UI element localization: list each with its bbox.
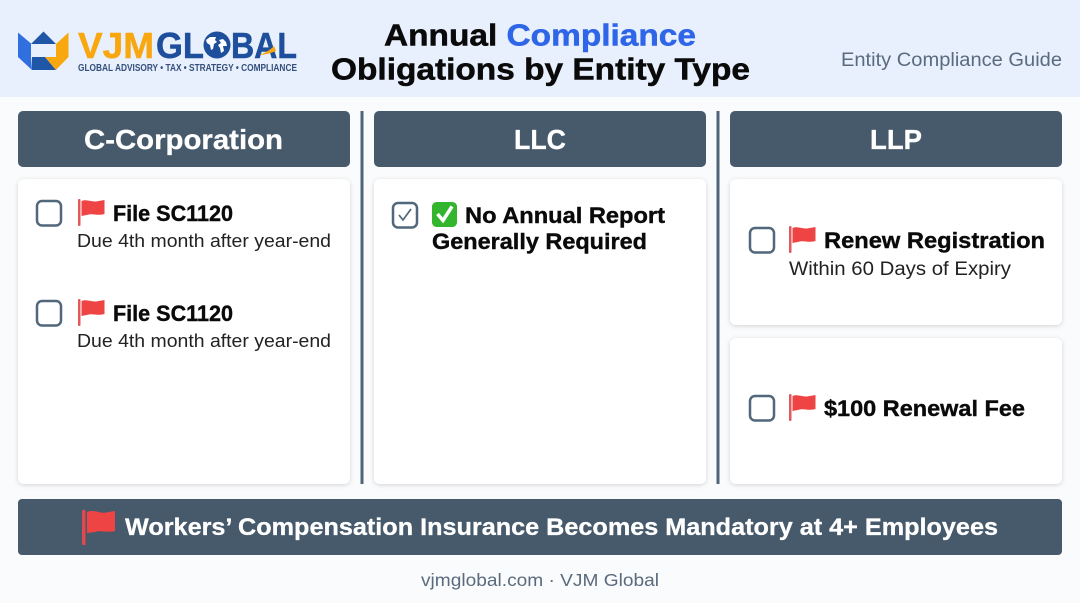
panel: LLP renew registration — [730, 179, 1062, 325]
column header: C-Corporation — [18, 111, 350, 167]
logo: VJM Global: GL — [156, 25, 204, 66]
panel: LLP renew registration: Renew Registration — [824, 228, 1045, 253]
footer: vjmglobal.com · VJM Global — [421, 570, 659, 590]
panel: LLP renewal fee: $100 Renewal Fee — [824, 396, 1025, 421]
column header: LLP — [730, 111, 1062, 167]
title — [331, 18, 750, 86]
column header: LLC: LLC — [514, 124, 566, 155]
column header: LLC — [374, 111, 706, 167]
logo: VJM Global — [18, 25, 297, 74]
panel: C-Corporation — [18, 179, 350, 484]
icon: red flag — [82, 510, 115, 545]
column header: LLP: LLP — [870, 124, 922, 155]
bottom banner — [18, 499, 1062, 555]
checklist item: File SC1120 — [37, 199, 331, 251]
header label: Entity Compliance Guide — [841, 50, 1062, 71]
checklist item: File SC1120 repeat: Due 4th month after year-end — [77, 331, 331, 351]
panel: LLP renew registration: Within 60 Days of Expiry — [789, 259, 1012, 280]
checklist item: no annual report: No Annual Report — [465, 203, 666, 228]
checklist item: File SC1120: File SC1120 — [113, 201, 233, 226]
header band — [0, 0, 1080, 97]
logo: VJM Global: GLOBAL ADVISORY • TAX • STRATEGY • COMPLIANCE — [78, 62, 297, 74]
panel: LLC — [374, 179, 706, 484]
logo: VJM Global: VJM — [78, 25, 154, 66]
title: Annual Compliance — [384, 18, 696, 52]
bottom banner: Workers’ Compensation Insurance Becomes Mandatory at 4+ Employees — [125, 514, 998, 541]
checklist item: no annual report: Generally Required — [432, 229, 647, 254]
checklist item: File SC1120 repeat: File SC1120 — [113, 301, 233, 326]
title: Obligations by Entity Type — [331, 52, 750, 86]
checklist item: File SC1120 repeat — [37, 299, 331, 351]
logo: VJM Global: BAL — [231, 25, 297, 66]
checklist item: File SC1120: Due 4th month after year-end — [77, 231, 331, 251]
checklist item: no annual report — [393, 202, 666, 254]
column header: C-Corporation: C-Corporation — [84, 124, 283, 155]
panel: LLP renewal fee — [730, 338, 1062, 484]
